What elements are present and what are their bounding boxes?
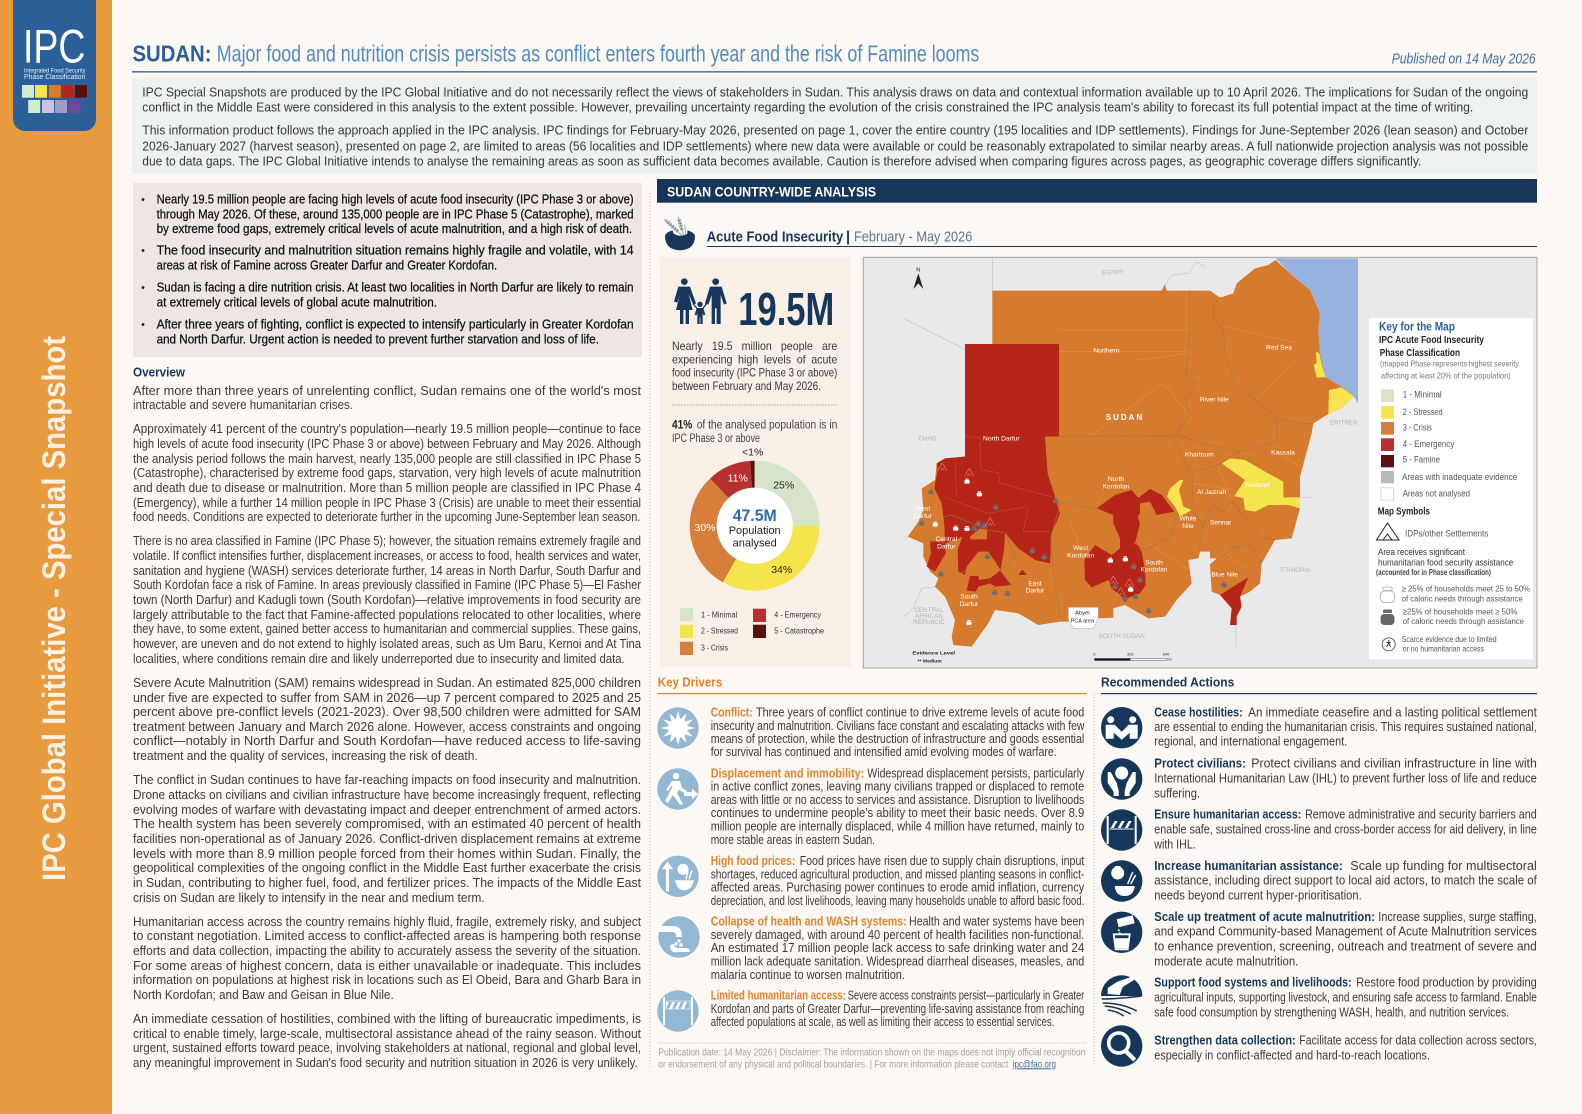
map key: humanitarian food security assistance — [1378, 557, 1513, 568]
action: humanitarian assistance: Increase humanitarian assistance: — [1154, 859, 1343, 873]
action: treatment of malnutrition: Scale up treatment of acute malnutrition: — [1154, 910, 1375, 924]
driver: displacement — [657, 767, 1085, 847]
action: food systems — [1101, 975, 1537, 1019]
intro note: conflict in the Middle East were considered in this analysis to the extent possible. However, prevailing uncertainty regarding the evolution of the crisis constrained the IPC analysis team's ability to forecast its full potential impact at the time of writing. — [142, 100, 1473, 115]
region labels: Red Sea — [1266, 344, 1292, 351]
disclaimer: Publication date: 14 May 2026 | Disclaimer: The information shown on the maps does not imply official recognition — [658, 1047, 1085, 1058]
overview paragraph 1: After more than three years of unrelenting conflict, Sudan remains one of the world's most — [133, 383, 641, 398]
summary text — [672, 339, 838, 393]
map key: (accounted for in Phase classification) — [1376, 568, 1491, 577]
summary text: between February and May 2026. — [672, 379, 821, 393]
overview paragraph 3: There is no area classified in Famine (IPC Phase 5); however, the situation remains extremely fragile and — [133, 533, 641, 548]
intro note — [132, 78, 1537, 174]
region labels: Khartoum — [1185, 452, 1214, 459]
summary text: experiencing high levels of acute — [672, 352, 838, 366]
icon: white bag — [1380, 587, 1394, 602]
region labels: River Nile — [1200, 397, 1229, 404]
overview paragraph 6: North Kordofan; and Baw and Geisan in Blue Nile. — [133, 987, 394, 1002]
section banner: SUDAN COUNTRY-WIDE ANALYSIS — [667, 184, 876, 200]
overview paragraph 6: For some areas of highest concern, data is either unavailable or inadequate. This includes — [133, 958, 641, 973]
IPC logo: Phase Classification — [24, 72, 85, 81]
map key: Map Symbols — [1378, 506, 1430, 518]
map key: Area receives significant — [1378, 547, 1465, 558]
map key: Areas not analysed — [1403, 489, 1470, 499]
overview paragraph 2: the analysis period follows the main harvest, nearly 135,000 people are still classified in IPC Phase 5 — [133, 451, 641, 466]
driver: health and WASH: severely damaged, with around 40 percent of health facilities non-functional. — [711, 928, 1084, 942]
map key: or no humanitarian access — [1403, 644, 1484, 654]
donut legend: 2 - Stressed — [701, 625, 738, 635]
overview paragraph 5: evolving modes of warfare with devastating impact and deeper entrenchment of armed actors. — [133, 802, 641, 817]
donut legend: 5 - Catastrophe — [774, 626, 824, 636]
driver: food prices: High food prices: — [711, 854, 795, 868]
neighbouring country labels — [913, 270, 1358, 640]
share text: IPC Phase 3 or above — [672, 433, 760, 445]
Abyei label — [1068, 607, 1098, 628]
neighbouring country labels: CHAD — [918, 436, 937, 443]
action: cease hostilities: regional, and international engagement. — [1154, 734, 1347, 748]
overview paragraph 3: sanitation and hygiene (WASH) services deteriorate further, 14 areas in North Darfur, South Darfur and — [133, 563, 641, 578]
action: food systems: Restore food production by providing — [1356, 976, 1537, 990]
action: protect civilians: suffering. — [1154, 786, 1200, 800]
icon: price rise — [657, 856, 699, 897]
driver: conflict: Three years of conflict continue to drive extreme levels of acute food — [756, 705, 1084, 719]
region labels: Al Jazirah — [1197, 489, 1227, 496]
overview paragraph 4: treatment and the quality of services, increasing the risk of death. — [133, 748, 478, 763]
page title: Major food and nutrition crisis persists as conflict enters fourth year and the risk of Famine looms — [217, 41, 979, 67]
key messages panel: After three years of fighting, conflict is expected to intensify particularly in Greater Kordofan — [157, 317, 634, 332]
Abyei label: Abyei — [1075, 611, 1090, 617]
summary text: food insecurity (IPC Phase 3 or above) — [672, 366, 837, 380]
overview paragraph 5: facilities non-operational as of January 2026. Conflict-driven displacement remains at extreme — [133, 831, 641, 846]
key messages panel: areas at risk of Famine across Greater Darfur and Greater Kordofan. — [157, 258, 497, 273]
overview paragraph 4: Severe Acute Malnutrition (SAM) remains widespread in Sudan. An estimated 825,000 children — [133, 675, 641, 690]
region labels: Northern — [1093, 348, 1120, 355]
region labels: North Darfur — [983, 435, 1020, 442]
map key: Phase Classification — [1380, 348, 1460, 359]
overview paragraph 2: and death due to disease or malnutrition. More than 5 million people are classified in IPC Phase 4 — [133, 480, 641, 495]
region labels: Darfur — [937, 543, 956, 550]
overview paragraph 3: they have, to some extent, gained better access to humanitarian and commercial supplies. These gains, — [133, 621, 641, 636]
icon: handshake — [1101, 707, 1142, 748]
donut chart: <1% — [742, 447, 763, 459]
action: humanitarian assistance: assistance, including direct support to local aid actors, to match the scale of — [1154, 873, 1537, 887]
driver: conflict — [657, 705, 1085, 759]
action: protect civilians: Protect civilians and civilian infrastructure in line with — [1251, 757, 1537, 771]
Abyei label: PCA area — [1071, 619, 1095, 625]
icon: protecting hands — [1101, 758, 1142, 800]
key messages panel — [133, 183, 642, 357]
driver: displacement: in active conflict zones, leaving many civilians trapped or displaced to remote — [711, 779, 1084, 793]
region labels: Kassala — [1271, 450, 1295, 457]
recommended actions section — [1101, 675, 1537, 1067]
icon: sowing field — [1101, 975, 1142, 1016]
share text — [672, 419, 837, 445]
north arrow: N — [916, 267, 920, 273]
overview paragraph 4: conflict—notably in North Darfur and South Kordofan—have reduced access to life-saving — [133, 733, 641, 748]
overview paragraph 3: town (North Darfur) and Kadugli town (South Kordofan)—relative improvements in food security are — [133, 592, 641, 607]
region labels: Darfur — [960, 601, 979, 608]
region labels: Blue Nile — [1211, 572, 1238, 579]
action: humanitarian assistance: needs beyond current hyper-prioritisation. — [1154, 888, 1362, 902]
map key: ≥25% of households meet ≥ 50% — [1403, 606, 1518, 616]
driver: displacement: areas with little or no access to services and assistance. Disruption to livelihoods — [711, 793, 1084, 807]
overview paragraph 1 — [133, 383, 641, 412]
region labels: Gedaref — [1245, 482, 1269, 489]
overview paragraph 7 — [133, 1011, 641, 1070]
overview paragraph 4: treatment between January and March 2026 alone. However, access constraints and ongoing — [133, 719, 641, 734]
overview paragraph 1: intractable and severe humanitarian crises. — [133, 397, 353, 412]
region labels: Darfur — [1026, 588, 1045, 595]
driver: displacement: million people are internally displaced, while 4 million have returned, mainly to — [711, 819, 1084, 833]
recommended actions heading: Recommended Actions — [1101, 675, 1234, 690]
driver: displacement: continues to undermine people's ability to meet their basic needs. Over 8.9 — [711, 806, 1084, 820]
state boundaries — [923, 291, 1313, 617]
icon: grey bag — [1380, 610, 1394, 625]
summary text: Nearly 19.5 million people are — [672, 339, 838, 353]
overview paragraph 7: critical to enable timely, large-scale, multisectoral assistance ahead of the rainy season. Without — [133, 1026, 641, 1041]
neighbouring country labels: EGYPT — [1102, 270, 1124, 277]
scale bar: 0 — [1093, 652, 1096, 657]
action: humanitarian assistance — [1101, 859, 1537, 902]
publication date: Published on 14 May 2026 — [1392, 52, 1536, 68]
donut legend — [680, 608, 824, 655]
region labels: SUDAN — [1106, 413, 1144, 422]
evidence level: Evidence Level — [912, 651, 956, 657]
action: protect civilians — [1101, 757, 1537, 800]
donut chart: 34% — [771, 564, 792, 576]
key drivers heading: Key Drivers — [658, 675, 722, 690]
overview paragraph 5: levels with more than 8.9 million people forced from their homes within Sudan. Finally, the — [133, 846, 641, 861]
overview paragraph 2 — [133, 421, 641, 524]
region labels: White — [1179, 515, 1197, 522]
neighbouring country labels: REPUBLIC — [913, 619, 945, 626]
overview paragraph 2: high levels of acute food insecurity (IPC Phase 3 or above) between February and May 2026. Although — [133, 436, 641, 451]
driver: conflict: means of protection, while the destruction of infrastructure and goods essential — [711, 732, 1084, 746]
driver: limited access: Kordofan and parts of Greater Darfur—preventing life-saving assistance from reaching — [711, 1002, 1084, 1016]
action: data collection: Facilitate access for data collection across sectors, — [1299, 1034, 1537, 1048]
region labels — [913, 344, 1295, 608]
overview paragraph 4: percent above pre-conflict levels (2021-2023). Over 98,500 children were admitted for SAM — [133, 704, 641, 719]
map key: Scarce evidence due to limited — [1402, 634, 1497, 644]
donut chart — [694, 447, 806, 577]
driver: conflict: for survival has continued and intensified amid evolving modes of warfare. — [711, 745, 1057, 759]
IPC logo: Integrated Food Security — [24, 67, 86, 74]
map panel — [863, 257, 1537, 668]
overview paragraph 3: however, are uneven and do not extend to highly isolated areas, such as Um Baru, Kernoi and At Tina — [133, 636, 642, 651]
icon: walking person — [657, 768, 699, 810]
overview paragraph 5: The conflict in Sudan continues to have far-reaching impacts on food insecurity and malnutrition. — [133, 772, 641, 787]
neighbouring country labels: ETHIOPIA — [1281, 567, 1311, 574]
action: data collection — [1101, 1025, 1537, 1067]
action: humanitarian assistance: Scale up funding for multisectoral — [1350, 859, 1537, 873]
driver: conflict: insecurity and malnutrition. Civilians face constant and escalating attacks with few — [711, 719, 1085, 733]
IPC logo: IPC — [23, 20, 85, 73]
map key: IPC Acute Food Insecurity — [1379, 335, 1484, 346]
action: humanitarian access: with IHL. — [1153, 837, 1196, 851]
icon: magnifier — [1101, 1025, 1142, 1067]
icon: tent — [1376, 523, 1399, 540]
donut chart: 30% — [694, 522, 716, 534]
overview paragraph 6: information on populations at highest risk in locations such as El Obeid, Bara and Gharb Bara in — [133, 972, 641, 987]
share text: of the analysed population is in — [697, 419, 837, 431]
neighbouring country labels: ERITREA — [1330, 420, 1358, 427]
icon: bowl with wheat — [664, 217, 695, 250]
driver: health and WASH — [658, 915, 1084, 982]
donut chart: 11% — [728, 473, 748, 485]
action: data collection: especially in conflict-affected and hard-to-reach locations. — [1154, 1048, 1430, 1062]
icon: family — [674, 278, 727, 324]
map key: 1 - Minimal — [1403, 390, 1442, 400]
key messages panel: and North Darfur. Urgent action is needed to prevent further starvation and loss of life. — [157, 332, 599, 347]
share text: 41% — [672, 419, 692, 431]
region labels: West — [1073, 545, 1088, 552]
region labels: East — [1028, 580, 1042, 587]
region labels: Sennar — [1210, 520, 1232, 527]
overview paragraph 5: geopolitical complexities of the ongoing conflict in the Middle East further exacerbate the crisis — [133, 860, 641, 875]
overview paragraph 7: any meaningful improvement in Sudan's food security and nutrition situation in 2026 is very unlikely. — [133, 1055, 638, 1070]
donut legend: 3 - Crisis — [701, 643, 728, 653]
donut chart: 47.5M — [733, 506, 777, 525]
overview paragraph 6: to constant negotiation. Limited access to conflict-affected areas is hampering both response — [133, 928, 641, 943]
map key — [1369, 318, 1533, 659]
driver: health and WASH: malaria continue to worsen malnutrition. — [711, 968, 905, 982]
donut chart: analysed — [733, 538, 777, 550]
driver: food prices — [657, 854, 1085, 908]
action: treatment of malnutrition — [1101, 910, 1537, 968]
overview paragraph 5: crisis on Sudan are likely to intensify in the near and medium term. — [133, 890, 485, 905]
key messages panel: Nearly 19.5 million people are facing high levels of acute food insecurity (IPC Phase 3 or above) — [157, 192, 634, 207]
driver: food prices: affected areas. Purchasing power continues to erode amid inflation, currency — [711, 880, 1085, 894]
sidebar — [0, 0, 112, 1114]
region labels: Kordofan — [1067, 552, 1094, 559]
assistance symbols — [919, 463, 1227, 625]
region labels: Kordofan — [1140, 567, 1168, 574]
neighbouring country labels: AFRICAN — [915, 613, 943, 620]
region labels: South — [960, 593, 978, 600]
driver: limited access — [657, 988, 1084, 1032]
overview paragraph 6 — [133, 914, 641, 1002]
map key: 3 - Crisis — [1403, 423, 1432, 433]
map key: affecting at least 20% of the population) — [1381, 371, 1511, 381]
sidebar vertical title: IPC Global Initiative - Special Snapshot — [36, 336, 72, 881]
donut legend: 4 - Emergency — [774, 610, 822, 620]
stressed areas — [1167, 480, 1192, 517]
action: humanitarian access: Remove administrative and security barriers and — [1305, 808, 1537, 822]
scale bar: km — [1167, 658, 1172, 662]
driver: health and WASH: Collapse of health and WASH systems: — [711, 915, 907, 929]
region labels: Darfur — [913, 513, 933, 520]
donut chart: 25% — [773, 479, 794, 491]
overview paragraph 2: Approximately 41 percent of the country's population—nearly 19.5 million people—continue to face — [133, 421, 641, 436]
driver: food prices: depreciation, and lost livelihoods, leaving many households unable to afford basic food. — [711, 894, 1084, 908]
driver: displacement: Displacement and immobility: — [711, 767, 864, 781]
action: treatment of malnutrition: to enhance prevention, screening, outreach and treatment of severe and — [1154, 939, 1537, 953]
panel: population summary — [660, 257, 851, 667]
key messages panel: by extreme food gaps, extremely critical levels of acute malnutrition, and a high risk of death. — [157, 221, 632, 236]
map of Sudan — [903, 258, 1358, 665]
overview paragraph 2: (Emergency), while a further 14 million people in IPC Phase 3 (Crisis) are unable to meet their essential — [133, 495, 641, 510]
neighbouring country labels: CENTRAL — [914, 607, 944, 614]
overview heading: Overview — [133, 365, 186, 380]
driver: displacement: Widespread displacement persists, particularly — [867, 767, 1085, 781]
map key: 4 - Emergency — [1403, 439, 1455, 449]
scale bar: 640 — [1163, 652, 1170, 657]
icon: scarce evidence — [1382, 638, 1395, 651]
driver: food prices: Food prices have risen due to supply chain disruptions, input — [800, 854, 1085, 868]
driver: limited access: affected populations at scale, as well as limiting their access to essential services. — [711, 1015, 1054, 1029]
region labels: North — [1108, 476, 1124, 483]
overview paragraph 2: food needs. Conditions are expected to deteriorate further in the upcoming June-September lean season. — [133, 509, 640, 524]
action: treatment of malnutrition: Increase supplies, surge staffing, — [1378, 910, 1537, 924]
overview paragraph 4: under five are expected to suffer from SAM in 2026—up 7 percent compared to 2025 and 25 — [133, 690, 641, 705]
driver: limited access: Limited humanitarian access: — [711, 988, 846, 1002]
donut chart: Population — [729, 525, 781, 537]
key messages panel: The food insecurity and malnutrition situation remains highly fragile and volatile, with 14 — [157, 243, 634, 258]
driver: limited access: Severe access constraints persist—particularly in Greater — [848, 988, 1084, 1002]
action: treatment of malnutrition: moderate acute malnutrition. — [1154, 954, 1298, 968]
key messages panel: through May 2026. Of these, around 135,000 people are in IPC Phase 5 (Catastrophe), marked — [157, 207, 634, 222]
Sudan crisis base — [908, 260, 1354, 647]
disclaimer: or endorsement of any physical and political boundaries. | For more information please contact — [658, 1059, 1008, 1070]
IPC logo — [13, 0, 96, 131]
action: protect civilians: International Humanitarian Law (IHL) to prevent further loss of life and reduce — [1154, 771, 1537, 785]
driver: health and WASH: million lack adequate sanitation. Widespread diarrheal diseases, measles, and — [711, 954, 1084, 968]
map key: (mapped Phase represents highest severity — [1380, 359, 1520, 369]
map key: of caloric needs through assistance — [1402, 594, 1523, 604]
region labels: South — [1145, 559, 1163, 566]
region labels: West — [915, 505, 930, 512]
emergency areas — [934, 344, 1060, 575]
action: cease hostilities: An immediate ceasefire and a lasting political settlement — [1248, 705, 1537, 719]
driver: food prices: shortages, reduced agricultural production, and missed planting seasons in conflict- — [711, 867, 1084, 881]
Red Sea water — [1276, 258, 1358, 403]
evidence level — [912, 651, 956, 665]
overview paragraph 5: Drone attacks on civilians and civilian infrastructure have become increasingly frequent, reflecting — [133, 787, 641, 802]
map key: 5 - Famine — [1403, 455, 1440, 465]
action: humanitarian access: Ensure humanitarian access: — [1154, 808, 1301, 822]
icon: money and food — [1101, 860, 1142, 902]
big number: 19.5M — [738, 283, 834, 335]
action: protect civilians: Protect civilians: — [1154, 757, 1246, 771]
action: food systems: Support food systems and livelihoods: — [1154, 976, 1352, 990]
acute food insecurity heading: | — [846, 230, 850, 246]
overview paragraph 4 — [133, 675, 641, 763]
neighbouring country labels: SOUTH SUDAN — [1099, 633, 1145, 640]
overview paragraph 6: efforts and data collection, impacting the ability to accurately assess the severity of the situation. — [133, 943, 641, 958]
overview paragraph 3 — [133, 533, 642, 666]
key drivers section — [657, 675, 1087, 1032]
overview paragraph 5: in Sudan, contributing to higher fuel, food, and fertilizer prices. The impacts of the Middle East — [133, 875, 641, 890]
overview paragraph 5 — [133, 772, 641, 905]
icon: barrier — [1101, 809, 1142, 851]
evidence level: ** Medium — [918, 659, 942, 665]
north arrow — [913, 267, 923, 289]
driver: conflict: Conflict: — [711, 705, 753, 719]
icon: explosion — [657, 707, 699, 749]
icon: tap and hand — [658, 916, 700, 958]
map key: 2 - Stressed — [1403, 407, 1443, 417]
internal boundaries light — [1018, 327, 1300, 600]
overview paragraph 3: localities, where conditions remain dire and likely underreported due to insecurity and limited data. — [133, 651, 625, 666]
action: treatment of malnutrition: and expand Community-based Management of Acute Malnutrition services — [1154, 924, 1537, 938]
overview paragraph 7: urgent, sustained efforts toward peace, involving stakeholders at national, regional and global level, — [133, 1040, 641, 1055]
overview paragraph 7: An immediate cessation of hostilities, combined with the lifting of bureaucratic impediments, is — [133, 1011, 641, 1026]
scale bar: 320 — [1127, 652, 1134, 657]
overview paragraph 2: (Catastrophe), characterised by extreme food gaps, starvation, very high levels of acute malnutrition — [133, 465, 641, 480]
section banner — [657, 179, 1537, 203]
action: food systems: safe food consumption by strengthening WASH, health, and nutrition services. — [1154, 1005, 1509, 1019]
driver: health and WASH: An estimated 17 million people lack access to safe drinking water and 24 — [711, 941, 1084, 955]
intro note: due to data gaps. The IPC Global Initiative intends to analyse the remaining areas as soon as sufficient data becomes available. Caution is therefore advised when comparing figures across pages, as geographic coverage differs significantly. — [142, 154, 1421, 169]
overview paragraph 6: Humanitarian access across the country remains highly fluid, fragile, extremely risky, and subject — [133, 914, 641, 929]
map key: Key for the Map — [1379, 319, 1455, 333]
overview paragraph 3: volatile. If conflict intensifies further, displacement increases, or access to food, health services and water, — [133, 548, 641, 563]
disclaimer — [658, 1043, 1086, 1070]
map key: of caloric needs through assistance — [1403, 616, 1524, 626]
scale bar — [1093, 652, 1172, 662]
overview paragraph 5: The health system has been severely compromised, with an estimated 40 percent of health — [133, 816, 641, 831]
map key: ≥ 25% of households meet 25 to 50% — [1402, 584, 1530, 594]
driver: health and WASH: Health and water systems have been — [909, 915, 1084, 929]
icon: barrier — [657, 990, 699, 1032]
key messages panel: at extremely critical levels of global acute malnutrition. — [157, 295, 437, 310]
disclaimer: ipc@fao.org — [1013, 1059, 1056, 1070]
overview paragraph 3: South Kordofan face a risk of Famine. In areas previously classified in Famine (IPC Phase 5)—El Fasher — [133, 577, 642, 592]
driver: displacement: more stable areas in eastern Sudan. — [711, 833, 875, 847]
acute food insecurity heading: February - May 2026 — [854, 230, 972, 246]
overview paragraph 3: largely attributable to the fact that Famine-affected populations relocated to other localities, where — [133, 607, 641, 622]
map key: Areas with inadequate evidence — [1402, 472, 1517, 482]
map key: IDPs/other Settlements — [1405, 529, 1489, 539]
action: data collection: Strengthen data collection: — [1154, 1034, 1296, 1048]
action: humanitarian access — [1101, 808, 1537, 851]
region labels: Nile — [1182, 523, 1194, 530]
page title: SUDAN: — [132, 41, 212, 67]
icon: sachet and glass — [1101, 912, 1142, 953]
key messages panel: Sudan is facing a dire nutrition crisis. At least two localities in North Darfur are likely to remain — [157, 280, 634, 295]
acute food insecurity heading — [707, 230, 1537, 247]
action: cease hostilities: Cease hostilities: — [1154, 705, 1243, 719]
region labels: Central — [936, 536, 958, 543]
overview text column — [133, 365, 642, 1070]
acute food insecurity heading: Acute Food Insecurity — [707, 230, 843, 246]
region labels: Kordofan — [1102, 483, 1130, 490]
action: cease hostilities — [1101, 705, 1537, 748]
donut legend: 1 - Minimal — [701, 609, 737, 619]
